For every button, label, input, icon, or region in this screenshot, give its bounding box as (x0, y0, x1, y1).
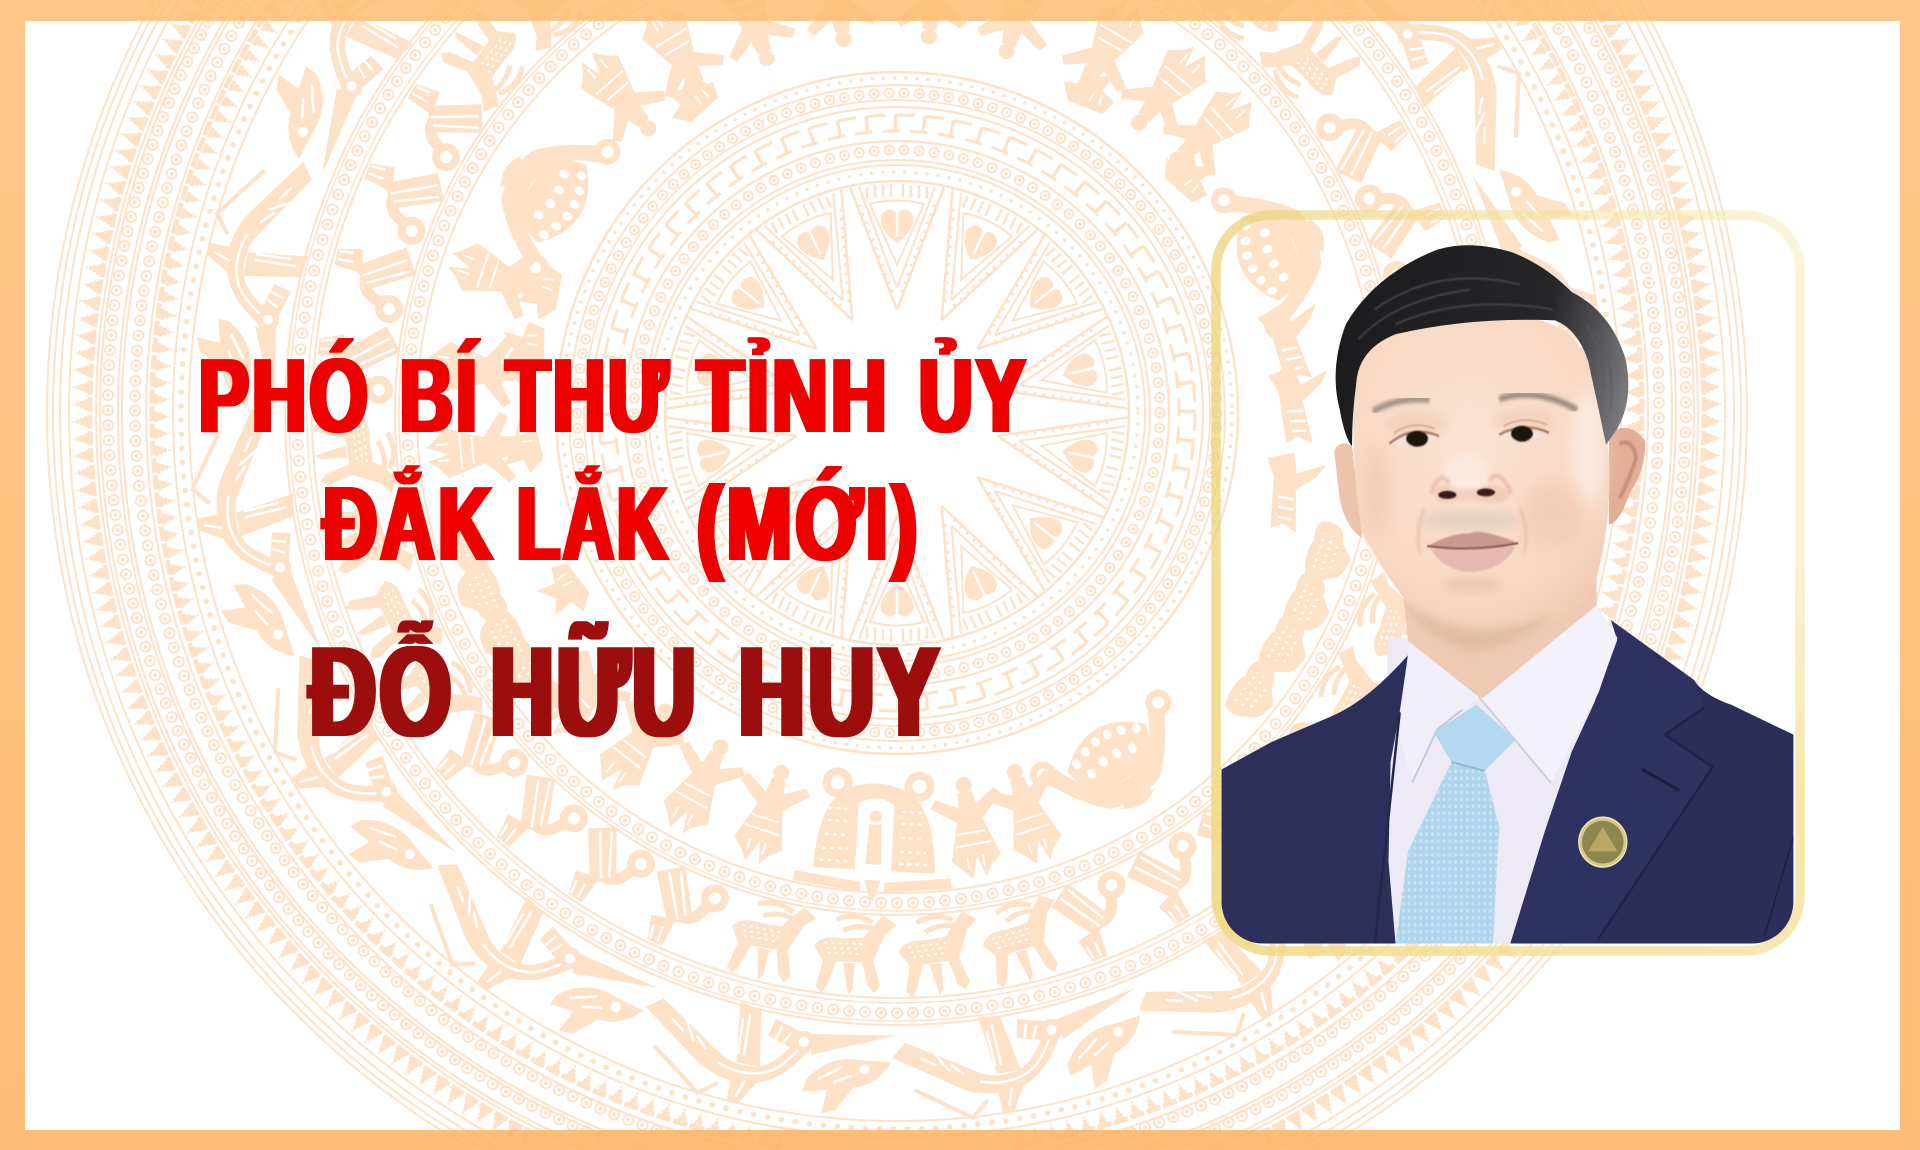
title: PHÓ BÍ THƯ TỈNH ỦY ĐẮK LẮK (MỚI): ĐẮK (323, 464, 496, 583)
name: ĐỖ HỮU HUY: HỮU (491, 620, 699, 764)
jacket (1221, 620, 1793, 944)
title: PHÓ BÍ THƯ TỈNH ỦY ĐẮK LẮK (MỚI): TỈNH (697, 337, 890, 455)
name: ĐỖ HỮU HUY (310, 619, 943, 764)
title: PHÓ BÍ THƯ TỈNH ỦY ĐẮK LẮK (MỚI): (MỚI) (697, 465, 921, 583)
title: PHÓ BÍ THƯ TỈNH ỦY ĐẮK LẮK (MỚI): LẮK (517, 464, 671, 583)
lapel pin (1579, 817, 1627, 867)
nose (1438, 488, 1495, 499)
shirt (1387, 638, 1619, 944)
tie (1396, 705, 1516, 944)
title: PHÓ BÍ THƯ TỈNH ỦY ĐẮK LẮK (MỚI): ỦY (919, 337, 1029, 455)
face (1353, 317, 1609, 650)
gold photo frame (1216, 215, 1800, 951)
eyebrows (1373, 399, 1430, 411)
collar (1400, 605, 1617, 783)
title: PHÓ BÍ THƯ TỈNH ỦY ĐẮK LẮK (MỚI): BÍ (400, 337, 480, 455)
eyes (1389, 420, 1549, 447)
title: PHÓ BÍ THƯ TỈNH ỦY ĐẮK LẮK (MỚI): THƯ (506, 337, 671, 455)
portrait of Đỗ Hữu Huy (1221, 245, 1793, 944)
name: ĐỖ HỮU HUY: ĐỖ (310, 619, 455, 764)
hair (1336, 245, 1628, 446)
title: PHÓ BÍ THƯ TỈNH ỦY ĐẮK LẮK (MỚI): PHÓ (199, 337, 371, 455)
name: ĐỖ HỮU HUY: HUY (739, 620, 943, 764)
neck (1402, 568, 1597, 698)
mouth (1427, 532, 1518, 572)
title: PHÓ BÍ THƯ TỈNH ỦY ĐẮK LẮK (MỚI) (199, 337, 1029, 583)
ears (1334, 428, 1645, 538)
